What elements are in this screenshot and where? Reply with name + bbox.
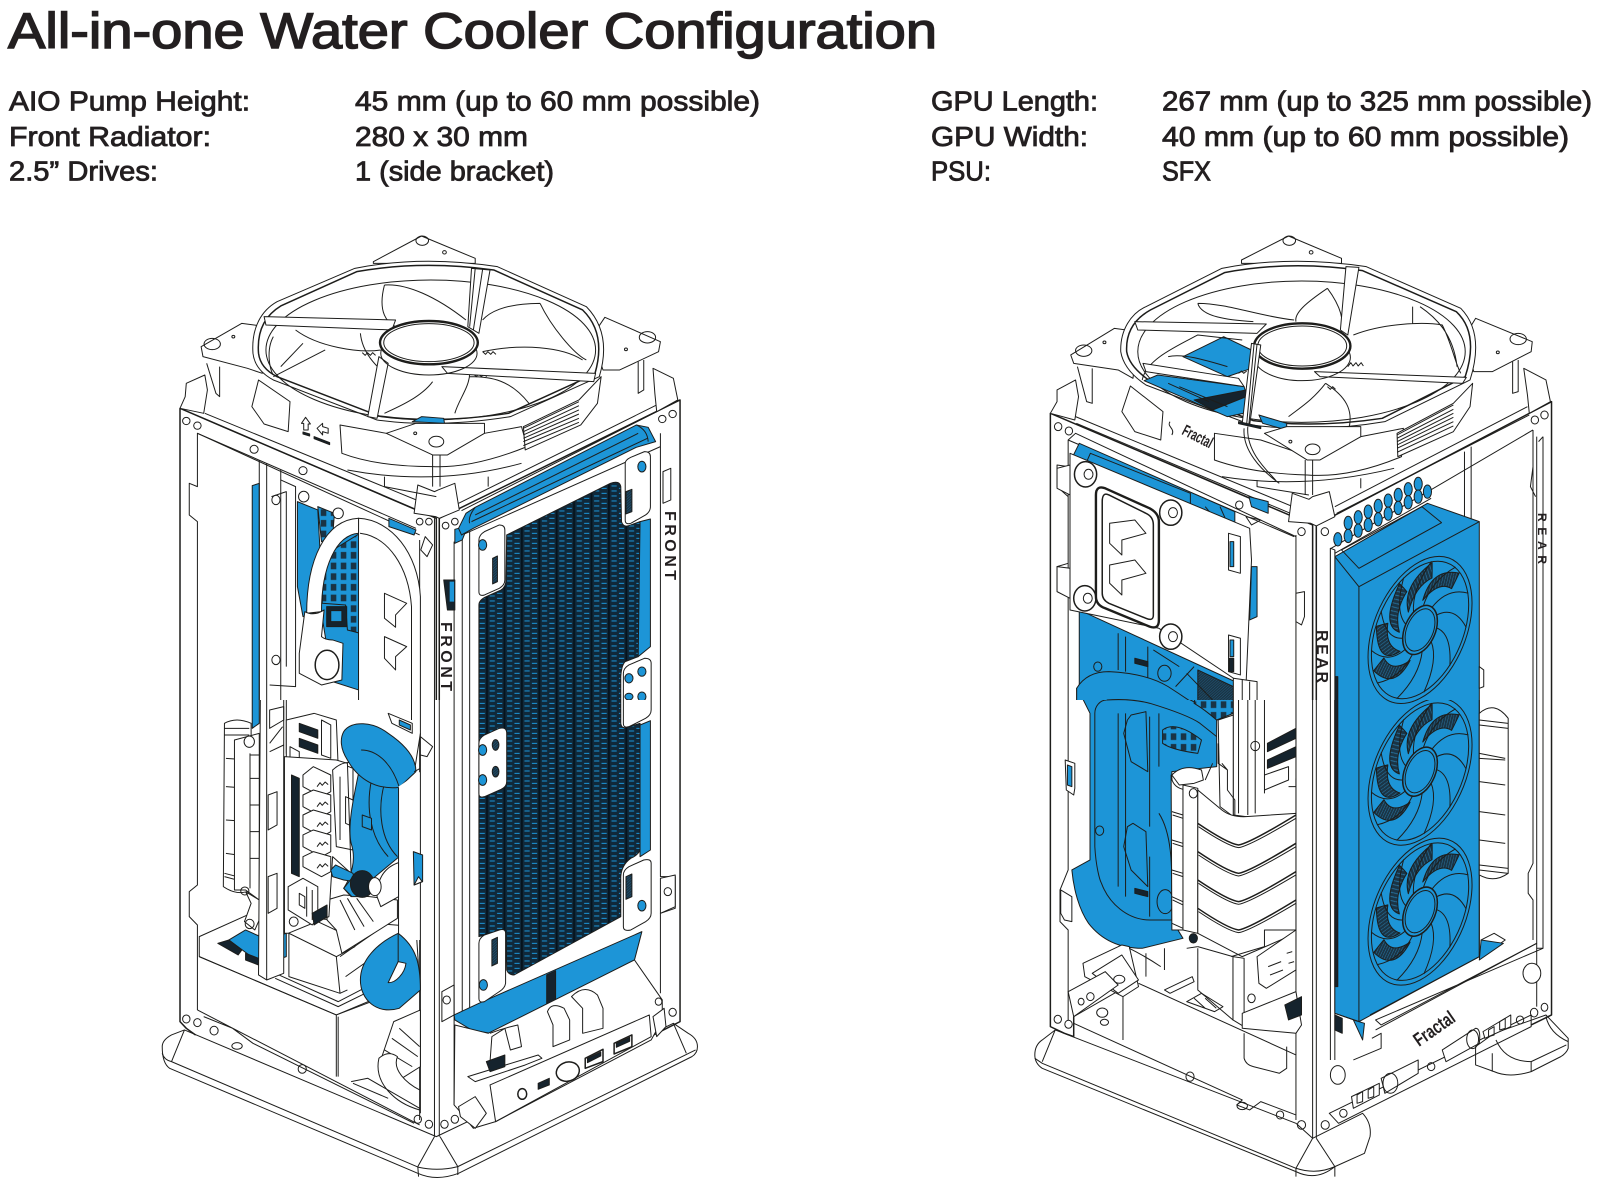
riser and motherboard xyxy=(1061,693,1302,1033)
spec: AIO pump height: AIO Pump Height: xyxy=(9,86,250,116)
spec: GPU width: GPU Width: xyxy=(931,121,1088,152)
label: front on pillar: FRONT xyxy=(437,622,454,694)
lower half of front view: interior, ports and foot xyxy=(162,693,697,1177)
title: All-in-one Water Cooler Configuration xyxy=(8,3,937,59)
spec: 2.5 inch drives: 1 (side bracket) xyxy=(355,156,554,186)
spec: PSU xyxy=(931,156,1211,186)
label: rear on side rail: REAR xyxy=(1535,513,1549,567)
motherboard connectors xyxy=(284,713,353,933)
illustration: rear view of case with GPU xyxy=(1035,236,1568,1177)
spec: 2.5 inch drives: 2.5” Drives: xyxy=(9,156,158,186)
upper half of rear view: fan, cover plate and GPU xyxy=(1050,236,1552,726)
top fan xyxy=(1071,236,1532,495)
blue water cooling tube xyxy=(331,713,433,1113)
brand: Fractal on rear panel: Fractal xyxy=(1410,1008,1460,1051)
case frame and floor xyxy=(1050,693,1552,1138)
upper half of front view: fan and radiator xyxy=(180,236,680,707)
spec: GPU width xyxy=(931,121,1569,152)
spec: GPU length xyxy=(931,86,1592,116)
brand: Fractal on fan frame: Fractal xyxy=(1179,422,1215,452)
top fan xyxy=(201,236,660,497)
label: front on side rail: FRONT xyxy=(661,511,678,583)
spec: GPU length: 267 mm (up to 325 mm possible) xyxy=(1162,86,1592,116)
spec: AIO pump height: 45 mm (up to 60 mm possible) xyxy=(355,86,760,116)
illustration: front view of case with radiator xyxy=(162,236,697,1177)
white cover plate with pump bracket xyxy=(1057,453,1304,707)
spec: 2.5 inch drives xyxy=(9,156,554,186)
front IO ports and cables xyxy=(454,960,666,1128)
spec list: left column xyxy=(9,86,760,186)
spec: front radiator: Front Radiator: xyxy=(9,121,211,152)
spec: PSU: PSU: xyxy=(931,156,991,186)
left interior: motherboard, tube and panel xyxy=(252,460,468,707)
PSU area and floor xyxy=(199,892,420,1077)
spec: PSU: SFX xyxy=(1162,156,1211,186)
case frame xyxy=(180,693,680,1137)
radiator lower part xyxy=(454,693,675,1033)
GPU body with fans xyxy=(1334,700,1509,1040)
spec: GPU width: 40 mm (up to 60 mm possible) xyxy=(1162,121,1569,152)
base foot and feet xyxy=(1035,1015,1568,1177)
case frame xyxy=(180,368,680,707)
blue interior behind cover xyxy=(1073,442,1236,700)
spec: front radiator: 280 x 30 mm xyxy=(355,121,528,152)
water cooler radiator upper part xyxy=(459,425,656,707)
case frame xyxy=(1050,368,1552,707)
label: rear on pillar: REAR xyxy=(1313,630,1330,686)
spec: front radiator xyxy=(9,121,528,152)
spec list: right column xyxy=(931,86,1592,186)
spec: AIO pump height xyxy=(9,86,760,116)
base foot xyxy=(162,1023,697,1177)
drive cage and pillar xyxy=(223,693,420,980)
GPU body and vents xyxy=(1330,477,1484,726)
lower half of rear view: tube, riser, GPU and foot xyxy=(1034,700,1569,1177)
water cooling tube xyxy=(1072,680,1233,948)
spec: GPU length: GPU Length: xyxy=(931,86,1098,116)
